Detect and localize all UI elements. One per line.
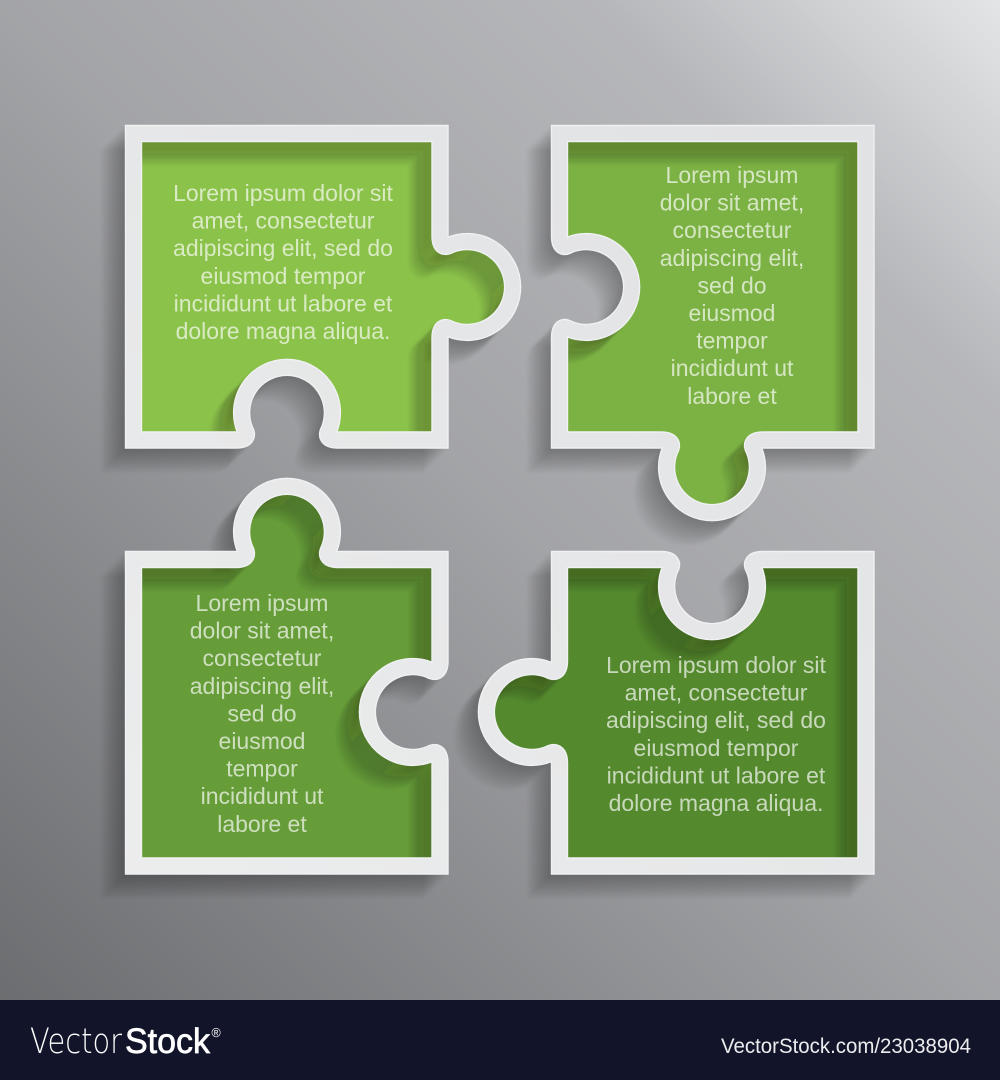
inner shadow of piece 2: [568, 142, 858, 502]
text block of piece 1: Lorem ipsum dolor sit: [173, 180, 394, 206]
drop shadow of piece 4: [462, 562, 863, 890]
text block of piece 2: sed do: [697, 272, 767, 298]
inner shadow of piece 4: [498, 568, 858, 858]
drop shadow of piece 2: [536, 136, 863, 537]
text block of piece 3: tempor: [226, 756, 298, 782]
footer logo: [30, 1021, 222, 1062]
frame of piece 4: [486, 560, 866, 866]
green fill of piece 3: [134, 486, 440, 866]
panel: puzzle piece 2, mid green, top right: [536, 134, 866, 537]
text block of piece 1: adipiscing elit, sed do: [173, 235, 393, 261]
text block of piece 3: dolor sit amet,: [190, 618, 334, 644]
text block of piece 3: sed do: [227, 700, 297, 726]
text block of piece 1: incididunt ut labore et: [174, 290, 393, 316]
text block of piece 2: consectetur: [673, 217, 792, 243]
frame of piece 1: [134, 134, 513, 440]
text block of piece 2: incididunt ut: [671, 355, 794, 381]
text block of piece 3: adipiscing elit,: [190, 673, 334, 699]
text block of piece 4: incididunt ut labore et: [607, 762, 826, 788]
footer bar: [0, 1000, 1000, 1080]
text block of piece 4: eiusmod tempor: [634, 735, 799, 761]
footer id text: VectorStock.com/23038904: [721, 1035, 971, 1058]
text block of piece 2: dolor sit amet,: [660, 190, 804, 216]
green fill of piece 1: [134, 134, 513, 440]
text block of piece 2: Lorem ipsum: [666, 162, 798, 188]
footer logo: ®: [212, 1026, 222, 1040]
drop shadow of piece 3: [110, 489, 437, 890]
text block of piece 4: Lorem ipsum dolor sit: [606, 652, 827, 678]
text block of piece 1: dolore magna aliqua.: [176, 318, 390, 344]
footer logo: Stock: [125, 1021, 210, 1061]
inner shadow of piece 3: [142, 495, 432, 858]
text block of piece 4: amet, consectetur: [625, 680, 808, 706]
text block of piece 3: incididunt ut: [201, 783, 324, 809]
text block of piece 4: dolore magna aliqua.: [609, 790, 823, 816]
text block of piece 2: eiusmod: [689, 300, 775, 326]
green fill of piece 4: [486, 560, 866, 866]
text block of piece 3: consectetur: [203, 645, 322, 671]
text block of piece 3: eiusmod: [219, 728, 305, 754]
text block of piece 1: amet, consectetur: [192, 208, 375, 234]
text block of piece 2: adipiscing elit,: [660, 245, 804, 271]
text block of piece 2: labore et: [687, 383, 777, 409]
panel: puzzle piece 1, light green, top left: [110, 134, 513, 464]
frame of piece 2: [560, 134, 866, 513]
green fill of piece 2: [560, 134, 866, 513]
text block of piece 3: labore et: [217, 811, 307, 837]
text block of piece 4: adipiscing elit, sed do: [606, 707, 826, 733]
panel: puzzle piece 3, darker green, bottom left: [110, 486, 440, 890]
footer logo: Vector: [30, 1022, 123, 1062]
text block of piece 2: tempor: [696, 328, 768, 354]
text block of piece 1: eiusmod tempor: [201, 263, 366, 289]
inner shadow of piece 1: [142, 142, 504, 432]
text block of piece 3: Lorem ipsum: [196, 590, 328, 616]
panel: puzzle piece 4, darkest green, bottom right: [462, 560, 866, 890]
frame of piece 3: [134, 486, 440, 866]
drop shadow of piece 1: [110, 136, 510, 464]
